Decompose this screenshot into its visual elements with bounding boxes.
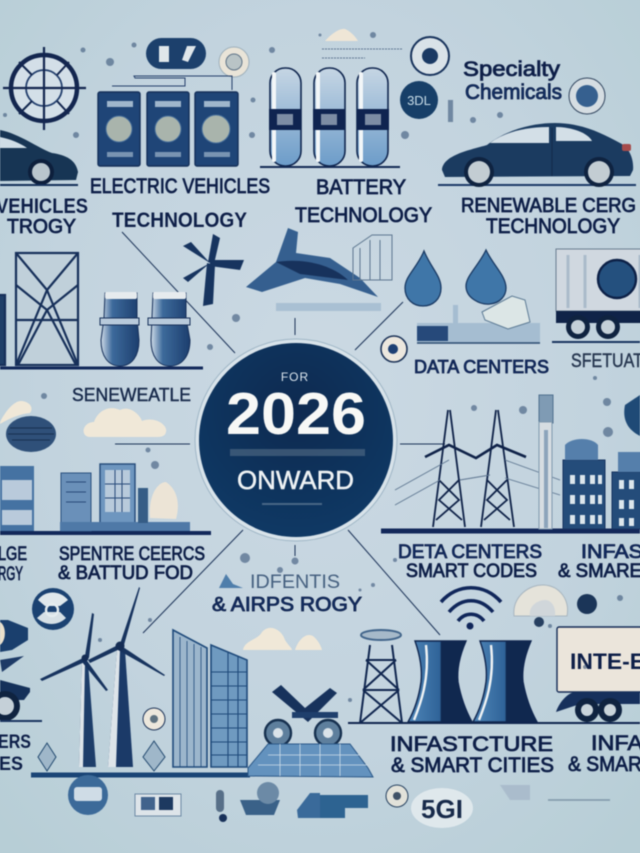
wind turbines bbox=[40, 587, 165, 767]
right city buildings bbox=[563, 439, 640, 529]
scattered micro icons bbox=[3, 32, 623, 702]
icon: water drops bbox=[405, 250, 506, 306]
heading: Infrastructure cut off bbox=[558, 542, 640, 582]
storage tanks bbox=[0, 292, 203, 368]
heading: Specialty Chemicals bbox=[463, 58, 562, 104]
lattice mast bbox=[348, 630, 640, 723]
lower truck with sign bbox=[556, 627, 640, 722]
small cloud icon bbox=[219, 574, 243, 588]
cooling towers bbox=[408, 641, 537, 722]
battery panels bbox=[98, 76, 238, 166]
heading: left lower cut off bbox=[0, 732, 31, 775]
small trees and ground bbox=[31, 708, 250, 775]
solar array base bbox=[248, 744, 373, 777]
small clouds bbox=[243, 628, 322, 650]
heading: Data Centers Smart Codes: SMART CODES bbox=[406, 561, 537, 582]
heading: Electric Vehicles Technology: TECHNOLOGY bbox=[112, 209, 247, 232]
badge: cut-off shield bbox=[624, 395, 640, 436]
small cream mound bbox=[322, 29, 402, 58]
icon: EV pill badge bbox=[146, 38, 206, 69]
heading: Spentre Ceercs bbox=[58, 544, 205, 584]
icon: ring lens bbox=[32, 588, 74, 630]
icon: aircraft bbox=[246, 228, 381, 311]
heading: Data Centers Smart Codes bbox=[398, 542, 542, 582]
icon: 5G badge: 5GI bbox=[421, 794, 463, 824]
heading: Renewable Energy Technology: TECHNOLOGY bbox=[486, 215, 620, 238]
icon: dark flower bbox=[577, 594, 597, 614]
heading: Seneweatle: SENEWEATLE bbox=[72, 385, 191, 405]
heading: Defense and Aerospace bbox=[212, 572, 362, 616]
heading: Infrastructure and Smart Cities: & SMART CITIES bbox=[391, 754, 554, 777]
heading: Spentre Ceercs: SPENTRE CEERCS bbox=[59, 544, 205, 565]
icon: globe seal bbox=[569, 78, 605, 114]
icon: 5G badge bbox=[411, 788, 473, 828]
heading: Spentre Ceercs: & BATTUD FOD bbox=[58, 563, 193, 584]
top right icon: ring bbox=[411, 37, 449, 75]
bottom row icons bbox=[68, 775, 610, 822]
battery capsules bbox=[260, 68, 400, 167]
heading: Infrastructure cut off lower bbox=[568, 732, 640, 776]
centre disc: For 2026 Onward: FOR bbox=[281, 370, 309, 384]
glass towers bbox=[173, 630, 247, 767]
heading: Electric Vehicles Technology: ELECTRIC VEHICLES bbox=[90, 175, 270, 198]
heading: Specialty Chemicals: Specialty bbox=[463, 58, 561, 81]
heading: Infrastructure cut off: INFAS bbox=[581, 542, 640, 563]
light pillar tower bbox=[539, 395, 553, 529]
heading: Defense and Aerospace: IDFENTIS bbox=[250, 572, 340, 593]
top right icon: 3DL badge: 3DL bbox=[407, 93, 431, 108]
heading: Electric Vehicles Technology bbox=[90, 175, 270, 232]
left car bbox=[0, 130, 78, 185]
icon: bottom ring badge bbox=[386, 785, 408, 807]
icon: mineral rock and crate bbox=[417, 296, 540, 343]
heading: left storage cut off bbox=[0, 544, 27, 585]
heading: Infrastructure cut off lower: INFA bbox=[591, 732, 640, 755]
right car bbox=[438, 123, 636, 187]
centre disc: For 2026 Onward: 2026 bbox=[226, 381, 366, 447]
heading: Battery Technology: TECHNOLOGY bbox=[295, 204, 432, 227]
icon: lamp bbox=[0, 620, 28, 652]
icon: dome bbox=[514, 585, 568, 627]
transmission towers and grid bbox=[381, 410, 640, 531]
lattice tower frame bbox=[0, 253, 78, 365]
heading: left vehicles: TROGY bbox=[7, 216, 76, 238]
icon: wifi signal bbox=[441, 588, 501, 630]
heading: Data Centers Smart Codes: DETA CENTERS bbox=[398, 542, 542, 563]
icon: compass wheel bbox=[3, 47, 86, 130]
icon: ring seal bbox=[381, 336, 407, 362]
upper truck bbox=[552, 249, 640, 342]
left city buildings bbox=[0, 464, 211, 533]
heading: Battery Technology bbox=[295, 176, 432, 227]
small lab sketch bbox=[353, 235, 392, 280]
heading: Renewable Energy Technology bbox=[461, 195, 636, 238]
heading: Data Centers: DATA CENTERS bbox=[414, 357, 549, 377]
heading: left vehicles bbox=[0, 195, 88, 238]
heading: Infrastructure and Smart Cities bbox=[390, 733, 554, 777]
heading: Infrastructure and Smart Cities: INFASTCTURE bbox=[390, 733, 553, 756]
top right icon: 3DL badge bbox=[400, 81, 438, 119]
heading: Specialty Chemicals: Chemicals bbox=[465, 81, 562, 104]
heading: Battery Technology: BATTERY bbox=[316, 176, 406, 199]
cloud bbox=[0, 401, 166, 437]
textured leaf mound bbox=[6, 416, 56, 452]
icon: coin bbox=[219, 47, 249, 77]
lower truck with sign: INTE-E bbox=[570, 649, 640, 674]
centre disc: For 2026 Onward bbox=[195, 339, 397, 541]
robotic arm machine bbox=[265, 685, 341, 746]
icon: propeller bbox=[183, 234, 244, 306]
lower left car bbox=[0, 656, 42, 721]
centre disc: For 2026 Onward: ONWARD bbox=[237, 465, 354, 495]
heading: Defense and Aerospace: & AIRPS ROGY bbox=[212, 594, 362, 616]
connector lines to the centre disc bbox=[115, 232, 445, 635]
